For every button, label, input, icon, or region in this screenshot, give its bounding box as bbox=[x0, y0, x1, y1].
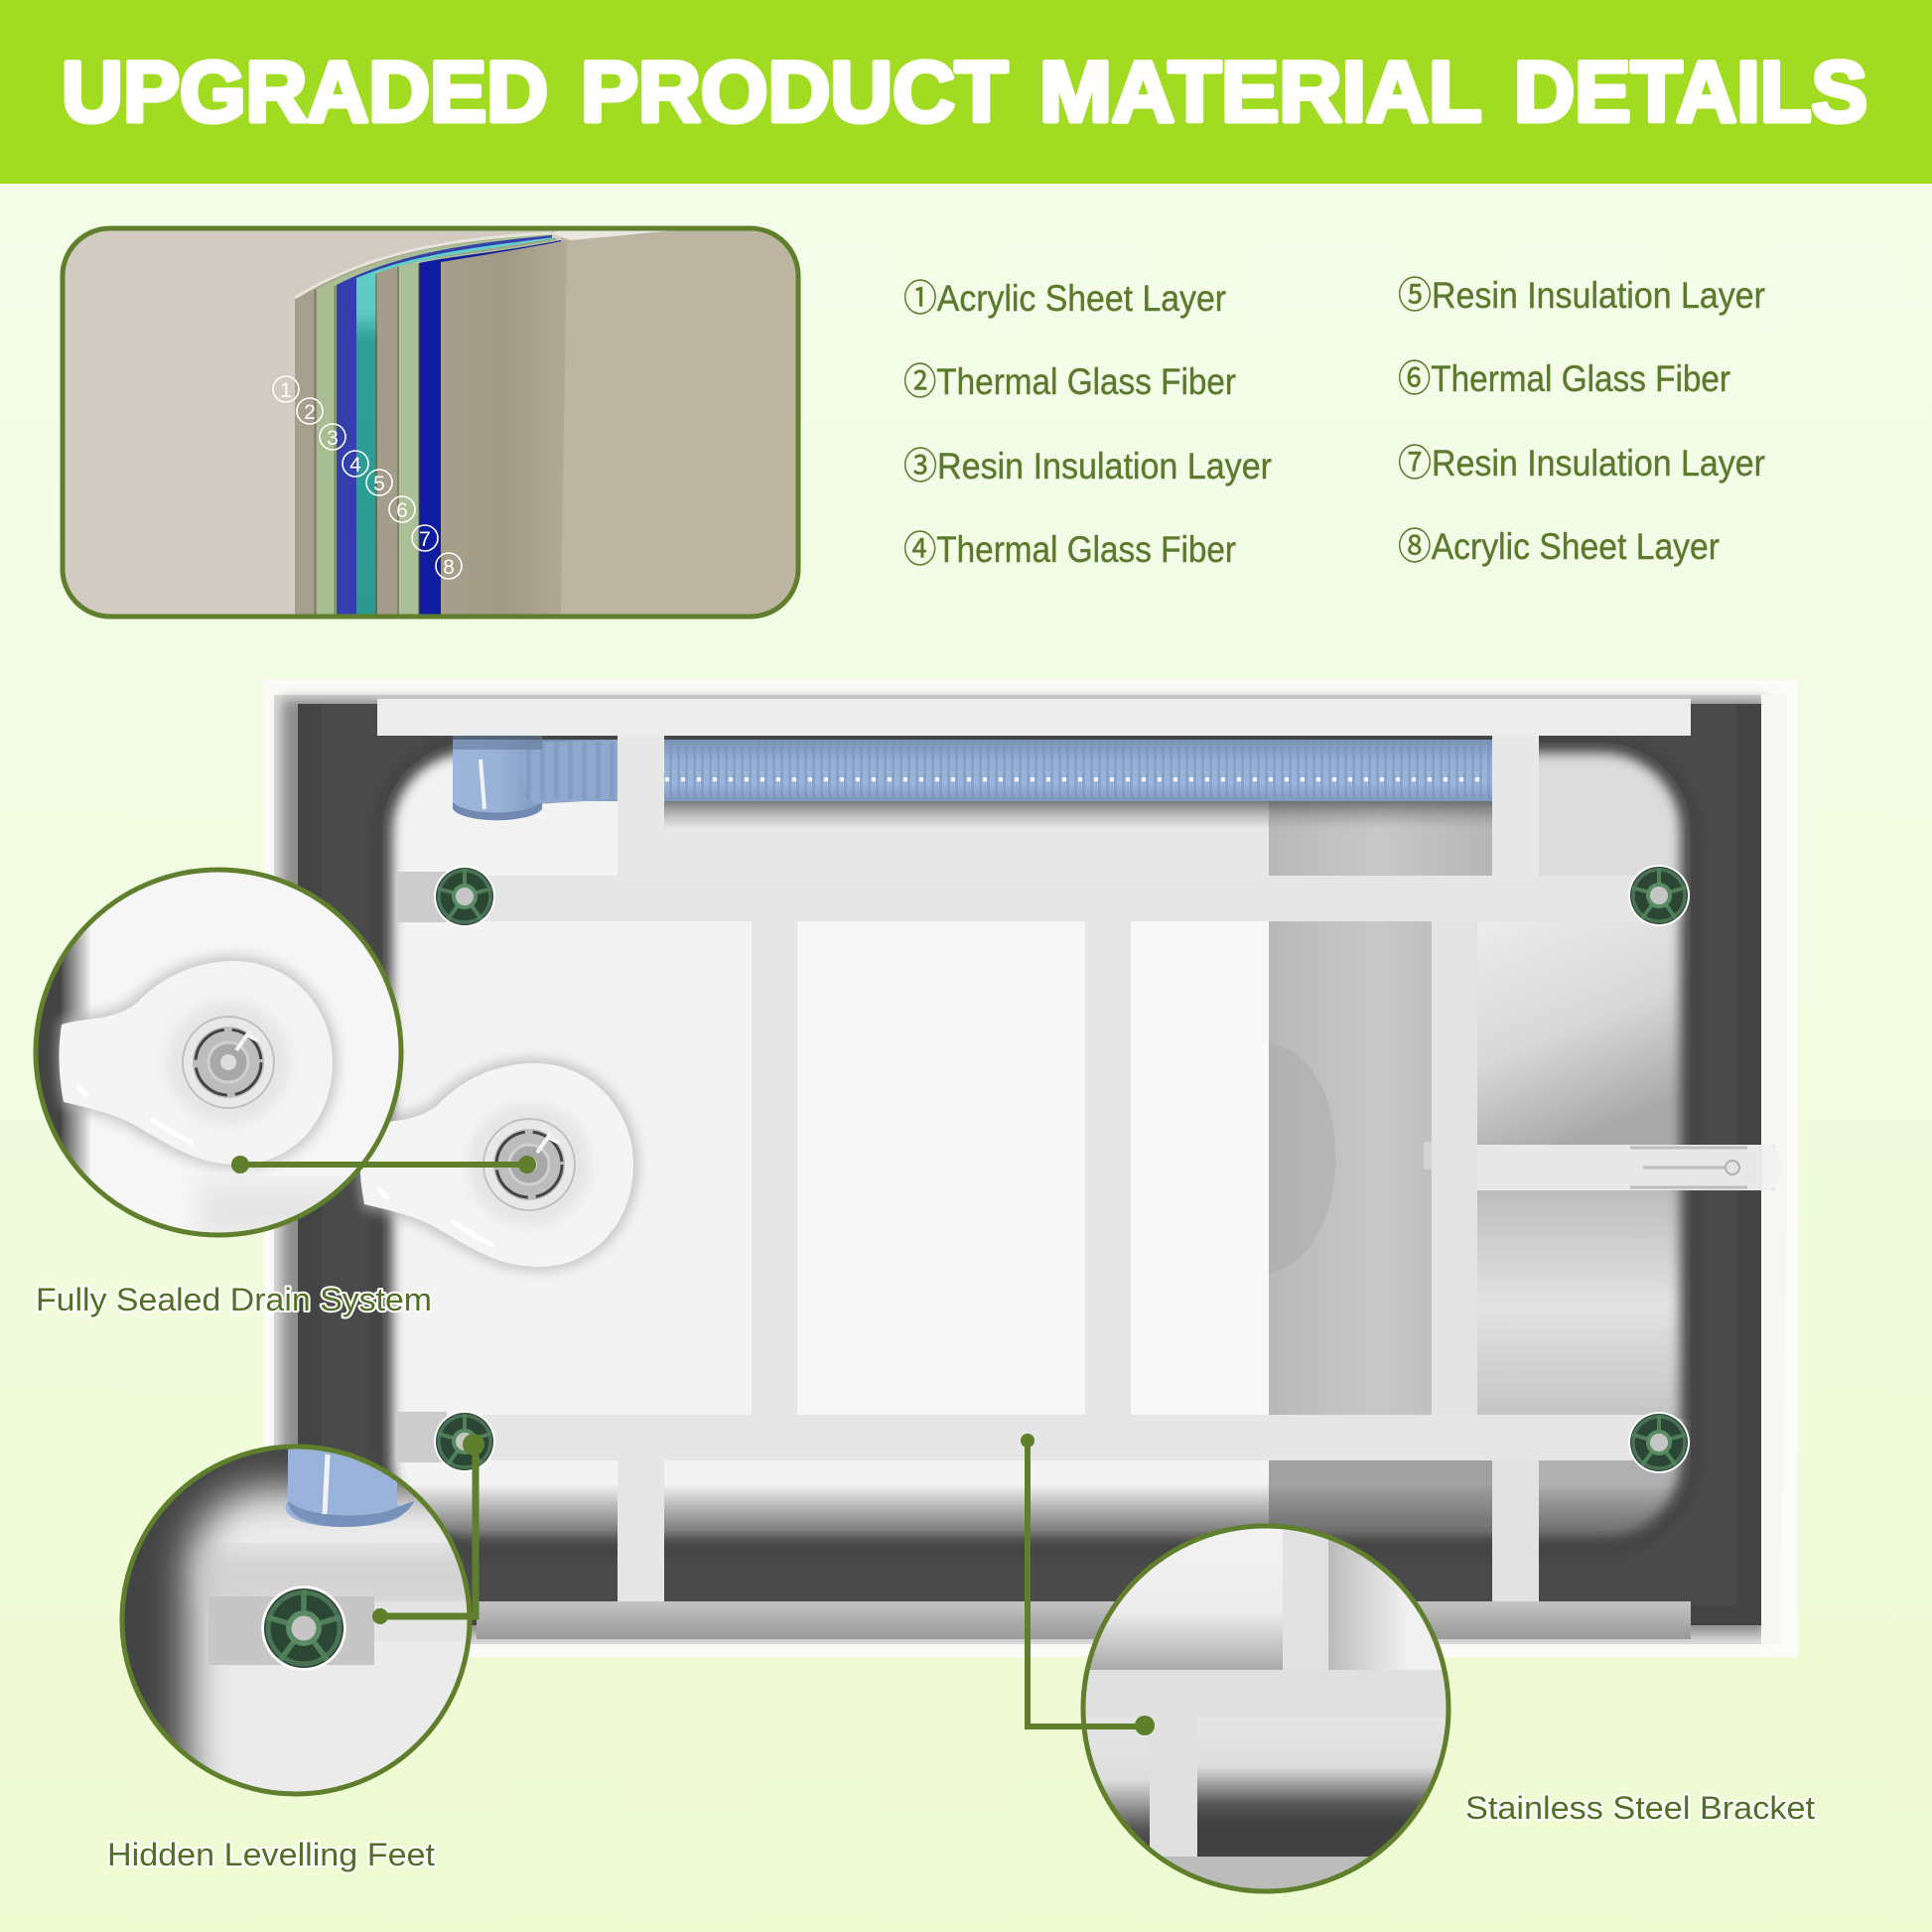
layer list left column: ④Thermal Glass Fiber bbox=[903, 529, 1236, 570]
caption: drain: Fully Sealed Drain System bbox=[36, 1282, 432, 1317]
layer list right column: ⑥Thermal Glass Fiber bbox=[1398, 358, 1730, 399]
layer list left column bbox=[903, 278, 1272, 570]
layer 8: acrylic sheet bbox=[441, 240, 567, 619]
layer list left column: ①Acrylic Sheet Layer bbox=[903, 278, 1226, 319]
drain pipe bbox=[453, 736, 1494, 820]
title: DETAILS bbox=[1514, 45, 1867, 140]
leveling foot bottom left bbox=[434, 1411, 495, 1472]
layer 6: glass fiber bbox=[398, 239, 558, 619]
callout: stainless steel bracket magnifier bbox=[1083, 1526, 1457, 1896]
layer 2: glass fiber bbox=[317, 234, 552, 619]
tray outer shell bbox=[264, 680, 1798, 1657]
callout line: levelling feet bbox=[372, 1434, 484, 1624]
drain fitting bbox=[357, 1058, 638, 1271]
layer numbers: 6 bbox=[396, 499, 408, 522]
title: MATERIAL bbox=[1039, 45, 1480, 140]
panel frame bbox=[63, 228, 798, 617]
caption: bracket: Stainless Steel Bracket bbox=[1465, 1790, 1815, 1826]
layer numbers: 7 bbox=[419, 528, 431, 551]
layer numbers bbox=[280, 379, 455, 579]
layer numbers: 4 bbox=[349, 454, 361, 477]
layer list right column: ⑧Acrylic Sheet Layer bbox=[1398, 526, 1720, 567]
layer 7: resin bbox=[419, 240, 561, 619]
layer list right column: ⑤Resin Insulation Layer bbox=[1398, 275, 1765, 316]
layer number markers bbox=[273, 376, 462, 579]
layer list left column: ②Thermal Glass Fiber bbox=[903, 361, 1236, 402]
header banner bbox=[0, 0, 1932, 184]
support frame bbox=[377, 697, 1781, 1639]
tray floor bbox=[367, 736, 1708, 1570]
layer 3: resin bbox=[337, 235, 552, 619]
layer list right column bbox=[1398, 275, 1765, 567]
layer numbers: 5 bbox=[373, 473, 385, 495]
layer list left column: ③Resin Insulation Layer bbox=[903, 446, 1272, 486]
layer numbers: 1 bbox=[280, 379, 292, 402]
product: shower tray underside bbox=[264, 680, 1798, 1657]
callout line: drain bbox=[231, 1156, 536, 1173]
caption: levelling feet: Hidden Levelling Feet bbox=[107, 1837, 435, 1872]
leveling foot top right bbox=[1628, 865, 1690, 926]
layer list right column: ⑦Resin Insulation Layer bbox=[1398, 443, 1765, 483]
layer numbers: 3 bbox=[327, 427, 339, 450]
callout line: bracket bbox=[1021, 1434, 1155, 1735]
layer numbers: 2 bbox=[304, 401, 316, 424]
layer 4: glass fiber bbox=[356, 237, 554, 619]
layer 1: acrylic sheet bbox=[295, 233, 552, 619]
leveling foot bottom right bbox=[1628, 1412, 1690, 1473]
layer 5: resin bbox=[377, 238, 556, 619]
layer numbers: 8 bbox=[443, 556, 455, 579]
title: UPGRADED bbox=[62, 45, 548, 140]
callout: hidden levelling feet magnifier bbox=[119, 1444, 473, 1797]
panel: layer cross-section bbox=[61, 226, 800, 619]
leveling foot top left bbox=[434, 866, 495, 927]
title: PRODUCT bbox=[581, 45, 1008, 140]
callout: fully sealed drain magnifier bbox=[36, 870, 417, 1241]
